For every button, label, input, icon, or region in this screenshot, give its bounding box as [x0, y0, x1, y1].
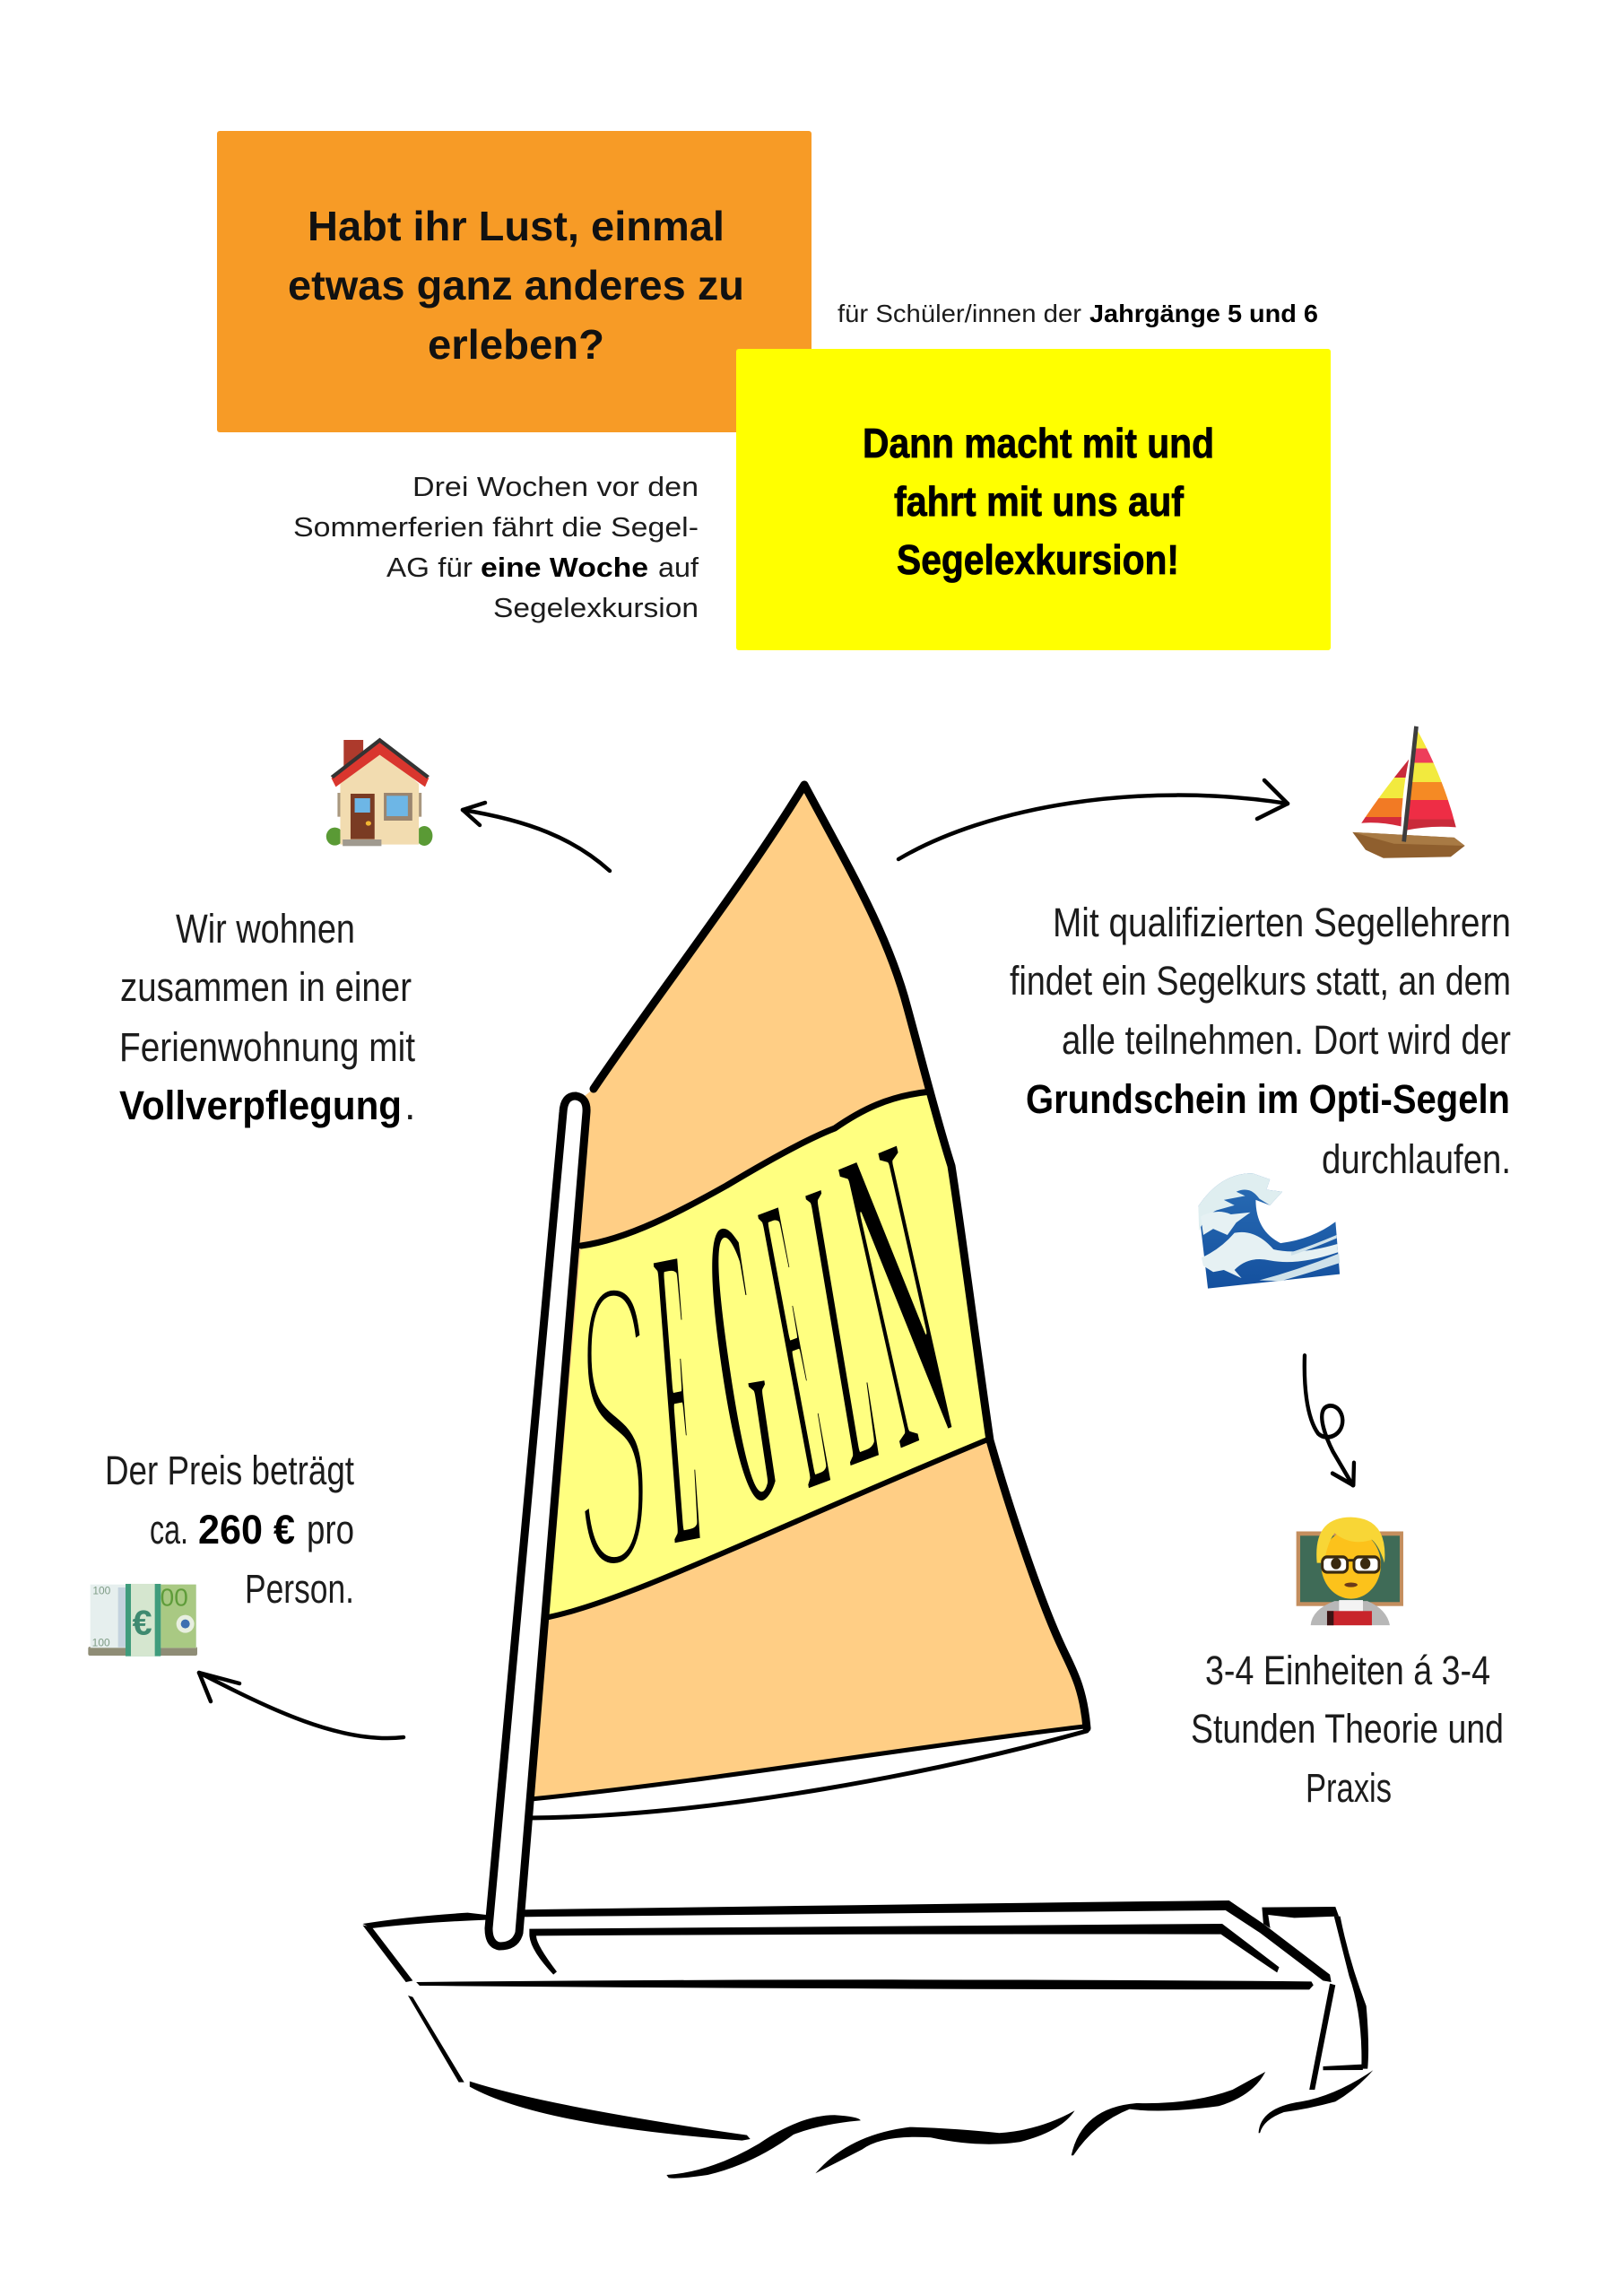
- icon: sailboat: [1352, 726, 1465, 858]
- text: sailing course: Mit qualifizierten Segellehrern: [1053, 900, 1511, 945]
- mast: [489, 1096, 586, 1946]
- heading: question: [288, 203, 744, 368]
- sail: outlines: [529, 785, 1087, 1818]
- icon: euro banknotes: €: [133, 1604, 152, 1643]
- icon: euro banknotes: 100: [92, 1584, 111, 1596]
- sail: orange fill: [529, 785, 1087, 1801]
- sail lettering: SEGELN: G: [682, 1121, 798, 1599]
- icon: euro banknotes: 00: [161, 1584, 188, 1612]
- heading: question: Habt ihr Lust, einmal: [308, 203, 725, 249]
- sail lettering: SEGELN: N: [812, 1038, 984, 1550]
- sail lettering: SEGELN: [576, 1038, 984, 1661]
- heading: invitation: [863, 420, 1214, 583]
- arrow: squiggle to teacher: [1305, 1355, 1354, 1485]
- heading: question: etwas ganz anderes zu: [288, 262, 744, 309]
- icon: wave: [1198, 1173, 1340, 1289]
- heading: invitation: Dann macht mit und: [863, 420, 1214, 466]
- arrow: sail to banknotes: [199, 1673, 404, 1738]
- text: theory and practice: Praxis: [1306, 1765, 1392, 1811]
- sail lettering: SEGELN: S: [576, 1192, 651, 1661]
- text: accommodation: Ferienwohnung mit: [119, 1024, 415, 1070]
- text: when the excursion takes place: Drei Wochen vor den: [412, 471, 699, 502]
- icon: teacher: [1297, 1518, 1403, 1625]
- text: accommodation: Wir wohnen: [176, 906, 355, 952]
- text: accommodation: Vollverpflegung: [119, 1083, 402, 1128]
- text: when the excursion takes place: eine Woche: [481, 552, 648, 583]
- text: price: pro: [307, 1507, 354, 1552]
- text: theory and practice: [1191, 1648, 1504, 1811]
- arrow: sail to sailboat: [898, 780, 1288, 859]
- text: price: ca.: [150, 1507, 188, 1552]
- icon: house: [326, 739, 432, 846]
- boat hull and waves: [362, 1900, 1373, 2179]
- text: price: 260 €: [198, 1507, 295, 1552]
- sail lettering: SEGELN: E: [736, 1097, 853, 1591]
- heading: invitation: fahrt mit uns auf: [894, 478, 1185, 525]
- text: accommodation: zusammen in einer: [120, 964, 412, 1010]
- text: sailing course: durchlaufen.: [1322, 1136, 1511, 1182]
- text: sailing course: alle teilnehmen. Dort wird der: [1062, 1017, 1511, 1063]
- text: target audience: [838, 300, 1318, 327]
- panel: orange question box: [217, 131, 812, 432]
- text: sailing course: findet ein Segelkurs statt, an dem: [1010, 958, 1511, 1004]
- text: price: Person.: [245, 1566, 354, 1612]
- text: when the excursion takes place: Segelexkursion: [493, 592, 699, 623]
- text: price: [105, 1448, 354, 1612]
- sail lettering: SEGELN: E: [644, 1145, 711, 1647]
- icon: euro banknotes: 100: [92, 1636, 110, 1648]
- text: sailing course: [1010, 900, 1511, 1182]
- text: accommodation: [119, 906, 416, 1128]
- sail: yellow band: [549, 1091, 990, 1617]
- heading: invitation: Segelexkursion!: [897, 536, 1179, 583]
- arrow: sail to house: [463, 803, 610, 871]
- illustration: sailing dinghy: [362, 785, 1373, 2179]
- text: theory and practice: Stunden Theorie und: [1191, 1706, 1504, 1752]
- sail lettering: SEGELN: L: [785, 1076, 899, 1567]
- text: sailing course: Grundschein im Opti-Segeln: [1026, 1076, 1510, 1122]
- text: when the excursion takes place: [293, 471, 699, 623]
- text: when the excursion takes place: AG für: [386, 552, 473, 583]
- text: target audience: Jahrgänge 5 und 6: [1089, 300, 1318, 327]
- text: price: Der Preis beträgt: [105, 1448, 354, 1493]
- text: accommodation: .: [404, 1083, 416, 1128]
- icon: euro banknotes: [88, 1584, 197, 1657]
- text: when the excursion takes place: Sommerferien fährt die Segel-: [293, 511, 699, 543]
- panel: yellow invitation box: [736, 349, 1331, 650]
- heading: question: erleben?: [428, 321, 604, 368]
- text: theory and practice: 3-4 Einheiten á 3-4: [1205, 1648, 1490, 1693]
- text: when the excursion takes place: auf: [658, 552, 699, 583]
- text: target audience: für Schüler/innen der: [838, 300, 1081, 327]
